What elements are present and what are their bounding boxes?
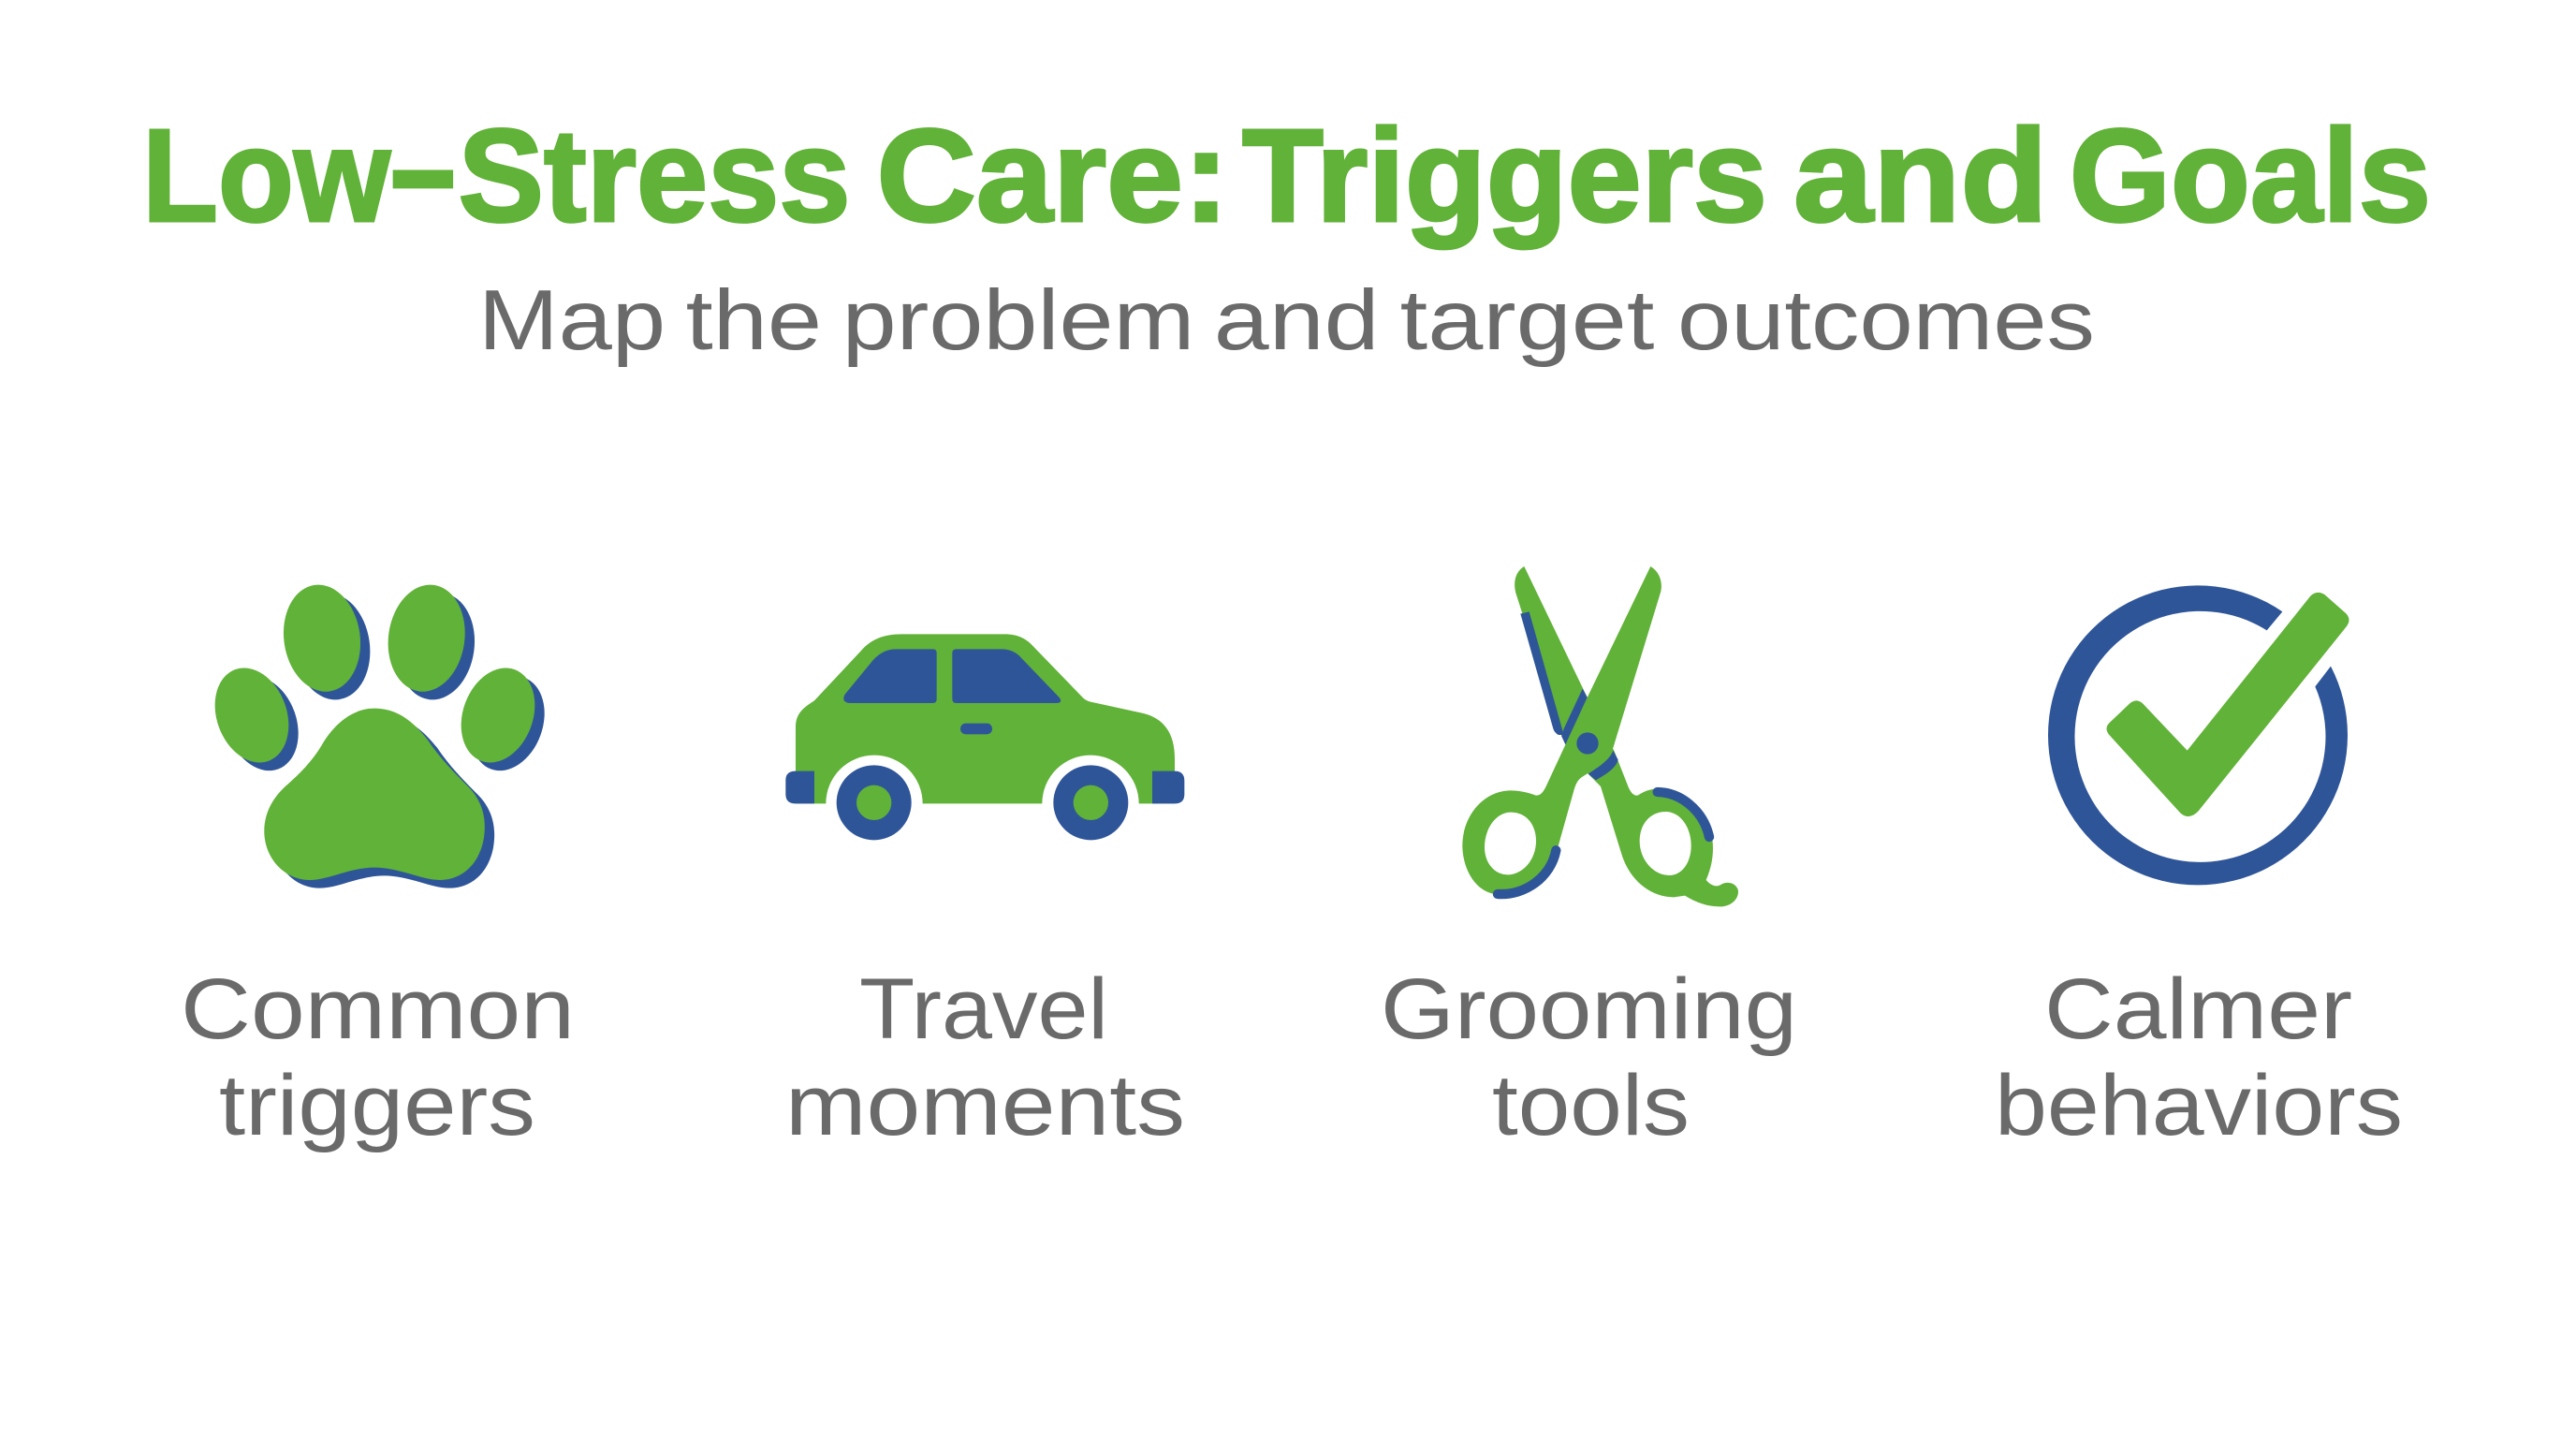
title: and: [1793, 101, 2048, 249]
title: Care:: [876, 101, 1229, 249]
subtitle: target: [1400, 273, 1654, 368]
subtitle: outcomes: [1677, 273, 2095, 368]
label: Calmer behaviors: behaviors: [1995, 1058, 2403, 1153]
title: -: [387, 94, 460, 242]
label: Grooming tools: Grooming: [1381, 961, 1797, 1057]
title: Stress: [459, 101, 851, 249]
title: Triggers: [1242, 101, 1767, 249]
subtitle: and: [1214, 273, 1380, 368]
label: Travel moments: moments: [785, 1058, 1185, 1153]
subtitle: the: [686, 273, 822, 368]
label: Common triggers: triggers: [219, 1058, 535, 1153]
label: Travel moments: [785, 961, 1185, 1153]
label: Travel moments: Travel: [859, 961, 1108, 1057]
title: Goals: [2070, 101, 2431, 249]
label: Common triggers: [181, 961, 575, 1153]
label: Grooming tools: tools: [1492, 1058, 1690, 1153]
icon: car: [785, 634, 1184, 840]
subtitle: Map: [478, 273, 666, 368]
label: Calmer behaviors: [1995, 961, 2403, 1153]
title: Low: [142, 101, 390, 249]
label: Grooming tools: [1381, 961, 1797, 1153]
icon: check mark in circle: [2048, 585, 2349, 885]
title: [142, 94, 2431, 249]
icon: paw print: [202, 580, 557, 888]
subtitle: [478, 273, 2095, 368]
icon: scissors: [1462, 566, 1738, 906]
label: Calmer behaviors: Calmer: [2044, 961, 2352, 1057]
subtitle: problem: [842, 273, 1194, 368]
label: Common triggers: Common: [181, 961, 575, 1057]
